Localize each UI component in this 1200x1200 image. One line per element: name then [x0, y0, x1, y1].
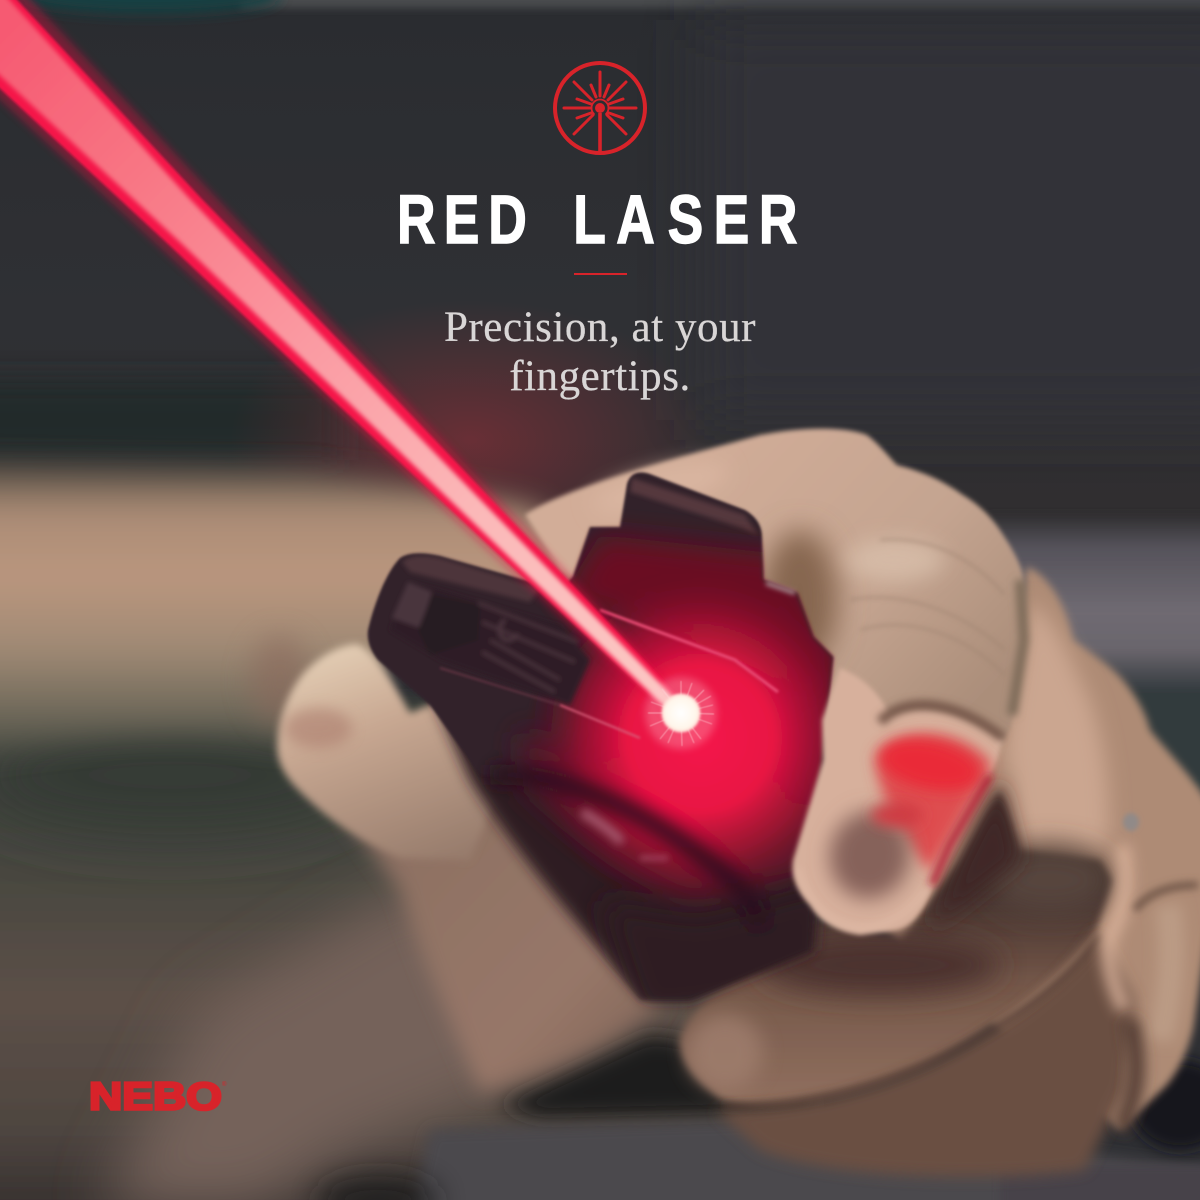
- top edge lighter strip: [240, 0, 1200, 8]
- forearm and hand: [0, 429, 1200, 1177]
- groove small highlight: [640, 856, 668, 860]
- dark teal band above arm: [0, 380, 340, 460]
- beam outer: [0, 0, 688, 717]
- right grey band and teal wall: [985, 515, 1200, 835]
- crescent highlight: [1108, 845, 1126, 1010]
- lower shell soft: [430, 690, 830, 1000]
- red rim beside finger: [932, 775, 990, 885]
- subtitle: [444, 304, 756, 400]
- icon stem: [598, 113, 602, 151]
- ridge line upper: [600, 610, 778, 692]
- bottom right strip: [1000, 1165, 1200, 1200]
- bottom dark spot: [318, 1176, 438, 1200]
- laser beam: [0, 0, 692, 720]
- bottom finger: [715, 930, 1135, 1177]
- thumb nail blush: [284, 708, 352, 748]
- softened glow and shading: [488, 523, 836, 1002]
- crease shadow above tip: [880, 705, 1003, 738]
- logo: NEBO: ®: [222, 1081, 227, 1088]
- icon long rays: [564, 72, 636, 134]
- lower groove: [490, 775, 760, 925]
- clip top highlight: [630, 478, 758, 535]
- crease between lower fingers: [725, 935, 1100, 1106]
- laser flare: [645, 677, 717, 749]
- finger base: [793, 668, 1003, 935]
- light spot: [662, 694, 700, 732]
- outer hand: [850, 567, 1200, 1130]
- clip pin highlight: [766, 583, 795, 593]
- clip maroon tone: [560, 535, 840, 720]
- back of hand: [525, 429, 1025, 780]
- ridge line front: [560, 705, 640, 738]
- brown lower forearm: [100, 880, 650, 1200]
- divider line: [574, 273, 627, 275]
- lighter tone at right of wall: [700, 20, 1200, 420]
- right edge shade of knuckle: [1012, 580, 1024, 715]
- red light core: [876, 731, 984, 799]
- clipped layer: [488, 523, 836, 1002]
- pale tip edge: [797, 868, 925, 928]
- palm heel: [345, 770, 662, 1092]
- forearm: [0, 462, 620, 760]
- crease lower: [1120, 1020, 1137, 1130]
- teal tint at top left: [20, 0, 280, 14]
- maroon lower shell: [520, 730, 840, 900]
- beam soft halo: [0, 0, 692, 720]
- flare rays: [648, 681, 714, 746]
- dark upper wall: [0, 0, 1200, 520]
- icon short rays: [577, 85, 623, 118]
- grey ring mark: [1123, 813, 1139, 831]
- title: RED LASER: [397, 182, 798, 259]
- icon ring: [555, 63, 645, 153]
- lower finger tip: [687, 1014, 763, 1090]
- beam core: [0, 0, 684, 714]
- palm under the finger: [680, 790, 1113, 1106]
- dark green shadow patch: [0, 715, 370, 835]
- ridge line lower: [440, 668, 560, 705]
- crease horizontal: [1135, 885, 1198, 910]
- pale skin near top of hand: [588, 452, 732, 524]
- icon: laser burst in circle: [555, 63, 645, 153]
- lower left background: [0, 700, 820, 1200]
- shadow beside finger: [930, 780, 1020, 930]
- lit outer knuckle: [1005, 600, 1109, 850]
- red glow: [530, 592, 830, 900]
- lower dark tip: [600, 872, 810, 1002]
- shadow right of clip: [762, 530, 838, 670]
- embossed label panel: [390, 582, 590, 705]
- index finger: [793, 668, 1003, 935]
- icon core: [595, 103, 605, 113]
- pink patch near wrist: [250, 635, 310, 725]
- subtitle: fingertips.: [509, 353, 691, 400]
- bottom dark floor band: [500, 1035, 820, 1118]
- fingernail shade: [820, 802, 920, 908]
- knuckle highlight: [845, 538, 945, 582]
- shadow beneath fingertip: [760, 935, 1000, 995]
- second red patch: [871, 803, 923, 827]
- groove highlight: [582, 812, 622, 842]
- right dark corner: [1130, 1060, 1200, 1150]
- bottom grey strip: [410, 1118, 1200, 1200]
- thumb: [277, 644, 495, 860]
- device upper shape: [368, 472, 833, 800]
- right finger segment: [1160, 905, 1171, 1040]
- icon arc: [592, 99, 609, 114]
- body top edge highlight: [402, 556, 540, 602]
- knuckle wrinkles: [850, 539, 1005, 675]
- knuckle shadow: [988, 846, 1112, 914]
- logo: NEBO: NEBO: [89, 1076, 222, 1118]
- flare halo: [645, 677, 717, 749]
- subtitle: Precision, at your: [444, 304, 756, 351]
- red light on fingertip: [875, 734, 992, 872]
- red haze around beam: [230, 300, 710, 580]
- laser device: [368, 472, 875, 1020]
